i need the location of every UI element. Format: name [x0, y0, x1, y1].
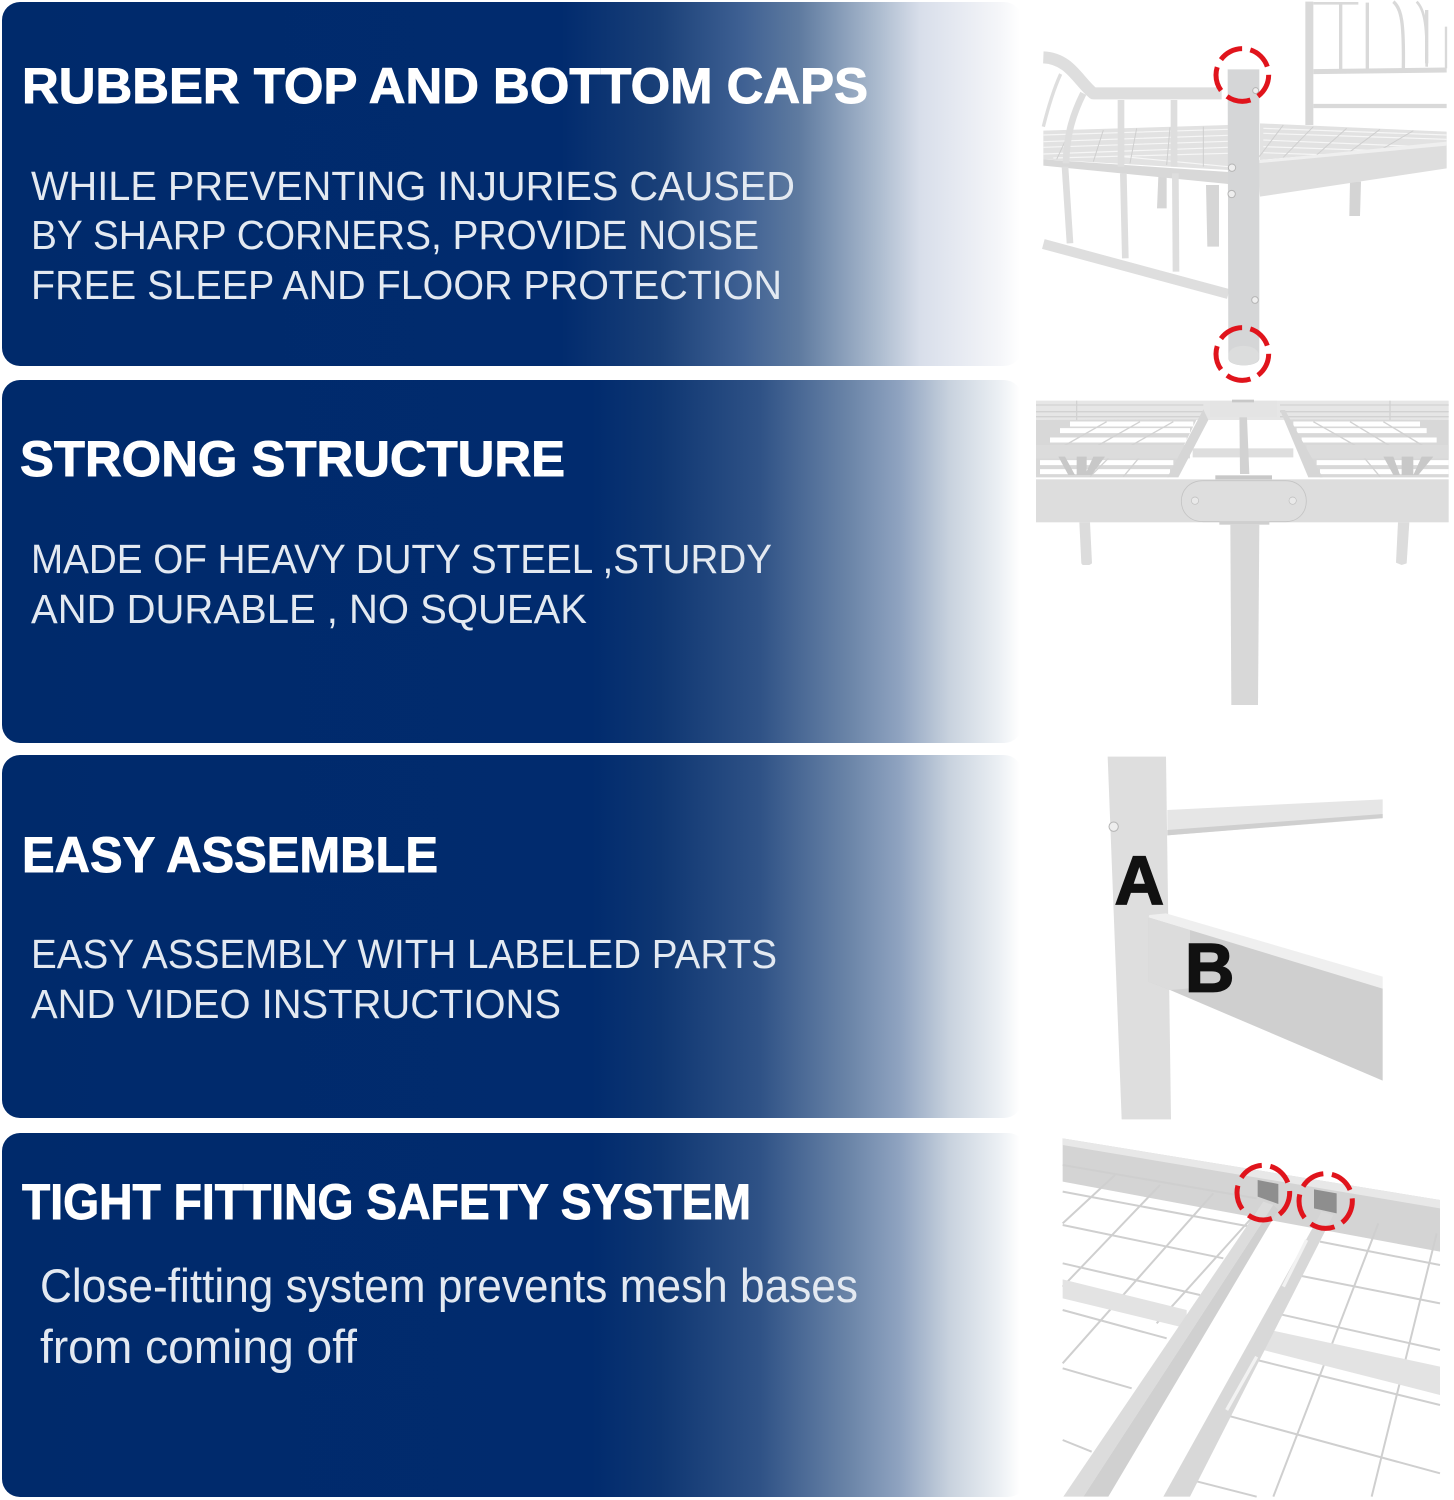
illustration: mesh bases fitted into frame slots — [1063, 1138, 1440, 1497]
text block: safety description: Close-fitting system prevents mesh bases — [40, 1259, 858, 1312]
callout: left slot ring — [1237, 1165, 1290, 1220]
callout: right slot ring — [1299, 1174, 1352, 1228]
callout: bottom cap ring — [1216, 328, 1269, 380]
callout: top cap ring — [1216, 49, 1269, 101]
text block: caps description: WHILE PREVENTING INJURIES CAUSED — [31, 163, 795, 209]
text block: structure description: MADE OF HEAVY DUTY STEEL ,STURDY — [31, 536, 772, 582]
text block: assembly description: EASY ASSEMBLY WITH LABELED PARTS — [31, 931, 777, 977]
text block: safety description — [40, 1259, 858, 1373]
panel: strong structure — [2, 380, 1022, 743]
illustration: center support leg and mesh frame — [1036, 400, 1449, 705]
heading: strong structure: STRONG STRUCTURE — [20, 431, 565, 487]
panel: tight fitting safety system — [2, 1133, 1026, 1497]
panel: rubber top and bottom caps — [2, 2, 1022, 366]
illustration: bed corner with rubber caps — [1043, 2, 1447, 380]
text block: safety description: from coming off — [40, 1320, 358, 1373]
panel: easy assemble — [2, 755, 1022, 1118]
text block: structure description — [31, 536, 772, 632]
illustration: labeled parts A and B — [1108, 757, 1383, 1119]
text block: structure description: AND DURABLE , NO SQUEAK — [31, 586, 587, 632]
heading: rubber top and bottom caps: RUBBER TOP AND BOTTOM CAPS — [22, 58, 868, 114]
heading: easy assemble: EASY ASSEMBLE — [22, 827, 438, 883]
text block: assembly description: AND VIDEO INSTRUCTIONS — [31, 981, 561, 1027]
text block: caps description: FREE SLEEP AND FLOOR PROTECTION — [31, 262, 782, 308]
label: part B: B — [1185, 931, 1234, 1007]
heading: tight fitting safety system: TIGHT FITTING SAFETY SYSTEM — [22, 1174, 751, 1230]
text block: assembly description — [31, 931, 777, 1027]
text block: caps description: BY SHARP CORNERS, PROVIDE NOISE — [31, 212, 759, 258]
label: part A: A — [1115, 843, 1164, 919]
text block: caps description — [31, 163, 795, 308]
